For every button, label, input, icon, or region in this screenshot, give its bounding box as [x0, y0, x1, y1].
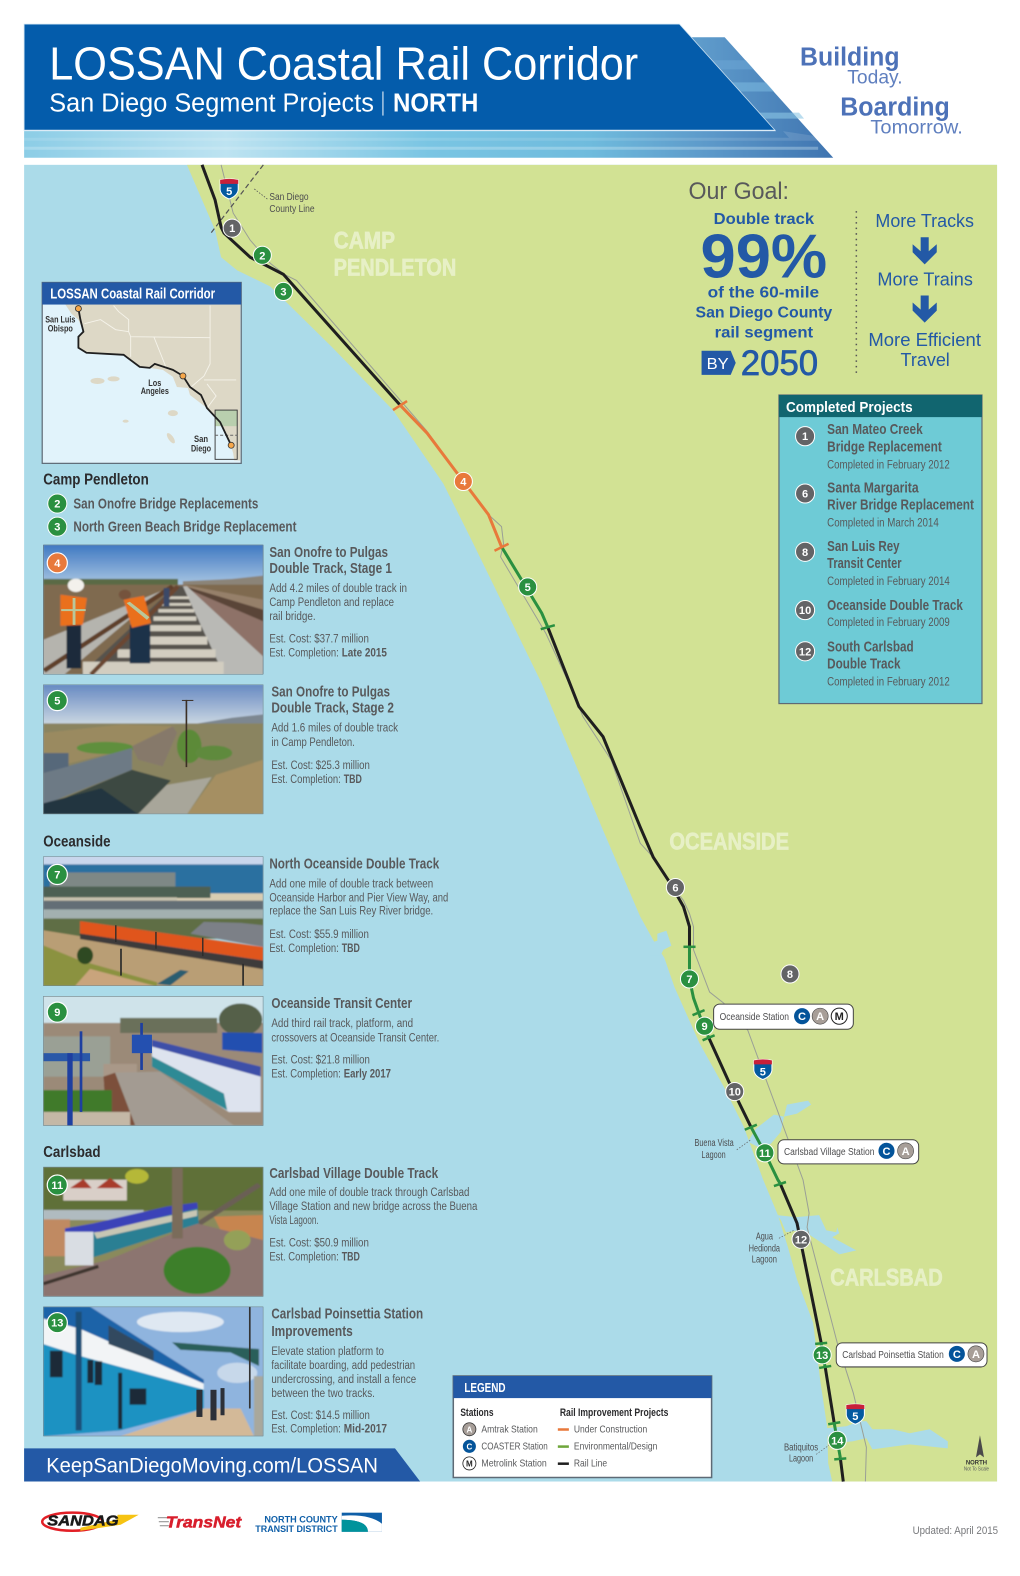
- project 7 text: North Oceanside Double Track: [269, 856, 440, 872]
- station label: Carlsbad Village: A: [902, 1146, 910, 1158]
- lagoon labels: Lagoon: [752, 1254, 777, 1265]
- station label: Oceanside: [714, 1004, 853, 1029]
- section heading: Carlsbad: Carlsbad: [43, 1143, 101, 1161]
- project 4 text: Est. Cost: $37.7 million: [269, 631, 369, 645]
- map project markers: 2: [259, 250, 265, 262]
- tagline: Boarding: [840, 92, 950, 122]
- photo: Oceanside Transit Center: [43, 996, 264, 1126]
- goal statement: [696, 210, 832, 383]
- lagoon labels: Buena Vista: [695, 1138, 734, 1149]
- map project markers: 14: [831, 1435, 844, 1447]
- photo: freight train at Oceanside: [43, 856, 264, 986]
- inset islands: [90, 376, 178, 445]
- logo: North County Transit District: NORTH COUNTY: [264, 1515, 338, 1525]
- panel: completed projects: Completed in February 2012: [827, 676, 950, 688]
- project 11 text: Est. Cost: $50.9 million: [269, 1235, 369, 1249]
- lagoon labels: [695, 1138, 830, 1464]
- station label: Oceanside: Oceanside Station: [720, 1012, 789, 1023]
- panel: completed projects: South Carlsbad: [827, 639, 914, 655]
- legend stations: Stations: [460, 1407, 494, 1419]
- project 11 text: Vista Lagoon.: [269, 1213, 319, 1227]
- project 13 text: Improvements: [271, 1324, 353, 1340]
- I-5 shields: 5: [226, 186, 232, 198]
- bridge projects list: 2: [54, 499, 60, 511]
- project 13 text: Est. Cost: $14.5 million: [271, 1408, 370, 1422]
- goal benefits: More Efficient: [868, 330, 981, 350]
- map project markers: 6: [672, 883, 679, 895]
- inset city labels: San Luis: [45, 315, 75, 326]
- panel: completed projects: Double Track: [827, 656, 901, 672]
- panel: completed projects: River Bridge Replacement: [827, 498, 974, 514]
- legend stations: Amtrak Station: [481, 1423, 538, 1435]
- project 4 text: San Onofre to Pulgas: [269, 545, 388, 561]
- project 9 text: Est. Completion:: [271, 1066, 341, 1080]
- panel: completed projects: Santa Margarita: [827, 480, 919, 497]
- logo: North County Transit District: [255, 1513, 382, 1534]
- tagline: Building: [800, 41, 900, 71]
- black rail segments: [202, 165, 843, 1482]
- map project markers: 1: [229, 223, 235, 235]
- badge 4: 4: [54, 558, 61, 570]
- panel: completed projects: 8: [802, 547, 808, 559]
- project 11 text: Village Station and new bridge across the Buena: [269, 1199, 478, 1213]
- lagoon labels: Lagoon: [702, 1150, 726, 1161]
- station label: Carlsbad Poinsettia: C: [953, 1349, 961, 1361]
- project 11 text: TBD: [342, 1249, 360, 1263]
- panel: completed projects: Completed in February 2014: [827, 576, 950, 588]
- goal panel: [688, 178, 981, 383]
- badge 5: [47, 691, 67, 711]
- badge 5: 5: [54, 696, 60, 708]
- station label: Oceanside: M: [835, 1011, 844, 1023]
- goal benefits: Travel: [901, 350, 950, 370]
- logo: TransNet: TransNet: [166, 1514, 242, 1532]
- badge 4: [47, 553, 67, 573]
- panel: inset corridor map: [42, 282, 241, 463]
- map project markers: 8: [787, 969, 793, 981]
- inset rail line: [78, 309, 231, 445]
- header banner: [24, 24, 833, 158]
- panel: completed projects: Oceanside Double Track: [827, 598, 964, 614]
- region labels: [334, 227, 943, 1292]
- region labels: CAMP: [334, 227, 395, 254]
- station label: Carlsbad Village: Carlsbad Village Station: [784, 1147, 874, 1158]
- inset header: [42, 282, 241, 305]
- goal statement: 99%: [701, 222, 827, 291]
- map project markers: 11: [759, 1148, 771, 1160]
- project 7 text: replace the San Luis Rey River bridge.: [269, 904, 433, 918]
- station label: Carlsbad Poinsettia: A: [972, 1349, 980, 1361]
- goal statement: of the 60-mile: [708, 284, 819, 302]
- inset city labels: Los: [148, 378, 161, 389]
- under construction segment: [400, 405, 502, 547]
- header blue panel: [24, 24, 775, 130]
- region labels: PENDLETON: [334, 254, 456, 281]
- project limit ticks: [393, 401, 846, 1459]
- project 13 text: Mid-2017: [344, 1421, 387, 1435]
- project 9 text: [271, 996, 439, 1080]
- goal benefits: More Trains: [877, 269, 973, 289]
- badge 11: 11: [51, 1180, 63, 1192]
- panel: completed projects: [779, 395, 982, 704]
- inset city labels: Angeles: [141, 386, 169, 397]
- goal heading: Our Goal:: [688, 178, 789, 205]
- I-5 shields: [220, 179, 864, 1424]
- north arrow: NORTH: [966, 1459, 987, 1466]
- project 13 text: Est. Completion:: [271, 1421, 341, 1435]
- project 5 text: Est. Completion:: [271, 772, 341, 786]
- map project markers: 13: [816, 1350, 828, 1362]
- inset city labels: San: [194, 434, 208, 445]
- tagline: Tomorrow.: [870, 118, 963, 139]
- project 5 text: in Camp Pendleton.: [271, 735, 355, 749]
- map project markers: 5: [525, 582, 531, 594]
- project 5 text: [271, 685, 399, 786]
- county line: [210, 165, 315, 234]
- project 7 text: Est. Cost: $55.9 million: [269, 927, 369, 941]
- highway I-5 line: [221, 165, 866, 1482]
- project 11 text: Est. Completion:: [269, 1249, 339, 1263]
- goal statement: Double track: [714, 210, 814, 228]
- inset stations: [75, 306, 234, 448]
- inset city labels: Obispo: [48, 324, 73, 335]
- map project markers: 12: [795, 1234, 807, 1246]
- project 11 text: Add one mile of double track through Carlsbad: [269, 1185, 469, 1199]
- website banner: KeepSanDiegoMoving.com/LOSSAN: [46, 1454, 378, 1477]
- map background: ocean: [24, 165, 997, 1482]
- badge 13: 13: [51, 1318, 63, 1330]
- legend stations: Metrolink Station: [481, 1457, 547, 1469]
- region labels: CARLSBAD: [830, 1265, 943, 1292]
- panel: inset corridor map: LOSSAN Coastal Rail Corridor: [50, 287, 215, 303]
- project 9 text: Early 2017: [344, 1066, 391, 1080]
- project 13 text: between the two tracks.: [271, 1386, 375, 1400]
- project 4 text: Add 4.2 miles of double track in: [269, 581, 407, 595]
- badge 7: [47, 864, 67, 884]
- I-5 shields: 5: [760, 1066, 766, 1078]
- header gradient band: [24, 37, 833, 158]
- legend stations: M: [466, 1459, 473, 1468]
- north arrow: [964, 1435, 989, 1472]
- project 9 text: Est. Cost: $21.8 million: [271, 1052, 370, 1066]
- section: Camp Pendleton: [43, 470, 297, 536]
- map project markers: 10: [729, 1087, 741, 1099]
- north arrow: Not To Scale: [964, 1466, 989, 1472]
- environmental design segments: [502, 547, 840, 1457]
- goal statement: rail segment: [715, 324, 814, 342]
- badge 9: [47, 1002, 67, 1022]
- heading: Camp Pendleton: [43, 470, 149, 488]
- legend: LEGEND: [464, 1380, 506, 1395]
- rail line: [202, 165, 846, 1482]
- county line: County Line: [269, 204, 315, 215]
- photo: Carlsbad Village train: [43, 1166, 264, 1297]
- project 4 text: Double Track, Stage 1: [269, 561, 392, 577]
- project 4 text: rail bridge.: [269, 609, 316, 623]
- legend rail projects: Rail Line: [574, 1457, 607, 1469]
- project 13 text: [271, 1307, 423, 1435]
- map project markers: [223, 219, 846, 1449]
- panel: completed projects: Completed in February 2012: [827, 459, 950, 471]
- project 4 text: [269, 545, 407, 659]
- panel: completed projects: Completed in March 2014: [827, 518, 939, 530]
- panel: completed projects: Completed Projects: [786, 399, 913, 416]
- station label: Carlsbad Poinsettia: [836, 1343, 987, 1367]
- logo: SANDAG: SANDAG: [47, 1513, 119, 1530]
- map project markers: 4: [460, 476, 467, 488]
- logo: SANDAG: [42, 1513, 139, 1531]
- project 9 text: Add third rail track, platform, and: [271, 1016, 413, 1030]
- tagline: Today.: [847, 67, 903, 88]
- legend rail projects: [558, 1407, 668, 1469]
- project 5 text: San Onofre to Pulgas: [271, 685, 390, 701]
- photo: rail bridge and canyon: [43, 684, 264, 814]
- project 11 text: Carlsbad Village Double Track: [269, 1166, 439, 1182]
- project 9 text: Oceanside Transit Center: [271, 996, 412, 1012]
- station label: Oceanside: A: [816, 1011, 824, 1023]
- goal benefits: More Tracks: [875, 211, 974, 231]
- map land: [187, 165, 997, 1482]
- website banner: [24, 1448, 420, 1482]
- panel: completed projects: Transit Center: [827, 556, 902, 572]
- lagoon labels: Batiquitos: [784, 1442, 818, 1453]
- lagoon labels: Lagoon: [789, 1453, 813, 1464]
- inset land: [65, 305, 240, 460]
- legend rail projects: Rail Improvement Projects: [560, 1407, 668, 1419]
- tagline: [800, 41, 963, 139]
- project 4 text: Late 2015: [342, 645, 387, 659]
- subtitle: San Diego Segment Projects: [49, 88, 374, 118]
- goal benefits: [868, 211, 981, 370]
- inset study area: [215, 410, 237, 426]
- panel: completed projects: 10: [799, 605, 811, 617]
- project 11 text: [269, 1166, 478, 1263]
- project 7 text: Est. Completion:: [269, 941, 339, 955]
- lagoon labels: Hedionda: [749, 1243, 780, 1254]
- badge 9: 9: [54, 1007, 60, 1019]
- panel: completed projects: San Mateo Creek: [827, 422, 923, 438]
- badge 13: [47, 1313, 67, 1333]
- legend rail projects: Environmental/Design: [574, 1440, 657, 1452]
- region labels: OCEANSIDE: [669, 828, 789, 855]
- legend stations: A: [466, 1425, 472, 1434]
- bridge projects list: [48, 494, 297, 536]
- panel: completed projects: Bridge Replacement: [827, 439, 942, 455]
- project 7 text: Oceanside Harbor and Pier View Way, and: [269, 891, 448, 905]
- lagoons: [650, 931, 948, 1449]
- project 13 text: facilitate boarding, add pedestrian: [271, 1358, 415, 1372]
- station label: Carlsbad Village: [778, 1140, 919, 1164]
- legend stations: [460, 1407, 548, 1470]
- station label: Oceanside: C: [798, 1011, 806, 1023]
- map project markers: 7: [686, 974, 693, 986]
- project 5 text: TBD: [344, 772, 362, 786]
- project 5 text: Est. Cost: $25.3 million: [271, 758, 370, 772]
- legend: [453, 1376, 712, 1478]
- project 4 text: Est. Completion:: [269, 645, 339, 659]
- legend stations: COASTER Station: [481, 1440, 548, 1452]
- project 4 text: Camp Pendleton and replace: [269, 595, 394, 609]
- project 5 text: Double Track, Stage 2: [271, 701, 394, 717]
- project 13 text: undercrossing, and install a fence: [271, 1372, 416, 1386]
- bridge projects list: San Onofre Bridge Replacements: [73, 497, 258, 513]
- bridge projects list: North Green Beach Bridge Replacement: [73, 520, 297, 536]
- station label: Carlsbad Village: C: [883, 1146, 891, 1158]
- title: LOSSAN Coastal Rail Corridor: [49, 37, 638, 89]
- panel: completed projects: 1: [802, 431, 808, 443]
- project 7 text: Add one mile of double track between: [269, 877, 433, 891]
- lagoon labels: Agua: [756, 1231, 773, 1242]
- I-5 shields: 5: [852, 1411, 858, 1423]
- project 7 text: [269, 856, 448, 955]
- inset city labels: [45, 315, 211, 454]
- logo: North County Transit District: TRANSIT DISTRICT: [255, 1524, 338, 1534]
- photo: Poinsettia station train: [43, 1306, 264, 1436]
- photo: track workers: [43, 544, 264, 674]
- project 9 text: crossovers at Oceanside Transit Center.: [271, 1030, 439, 1044]
- goal statement: 2050: [741, 344, 818, 383]
- station label: Carlsbad Poinsettia: Carlsbad Poinsettia Station: [842, 1350, 944, 1361]
- goal statement: BY: [707, 355, 729, 373]
- county line: San Diego: [269, 192, 309, 203]
- badge 7: 7: [54, 869, 60, 881]
- panel: completed projects: 6: [802, 489, 808, 501]
- update note: Updated: April 2015: [913, 1525, 998, 1537]
- bridge projects list: 3: [54, 522, 60, 534]
- panel: completed projects: Completed in February 2009: [827, 617, 950, 629]
- subtitle: NORTH: [393, 88, 478, 118]
- project 13 text: Elevate station platform to: [271, 1344, 384, 1358]
- project 13 text: Carlsbad Poinsettia Station: [271, 1307, 423, 1323]
- legend stations: C: [466, 1442, 472, 1451]
- map project markers: 3: [280, 286, 287, 299]
- inset county borders: [84, 306, 236, 408]
- panel: completed projects: 12: [799, 646, 811, 658]
- map project markers: 9: [701, 1021, 708, 1033]
- project 5 text: Add 1.6 miles of double track: [271, 721, 399, 735]
- panel: completed projects: San Luis Rey: [827, 539, 900, 555]
- legend rail projects: Under Construction: [574, 1423, 647, 1435]
- goal statement: San Diego County: [696, 304, 832, 322]
- project 7 text: TBD: [342, 941, 360, 955]
- inset city labels: Diego: [191, 443, 211, 454]
- section heading: Oceanside: Oceanside: [43, 832, 111, 850]
- badge 11: [47, 1175, 67, 1195]
